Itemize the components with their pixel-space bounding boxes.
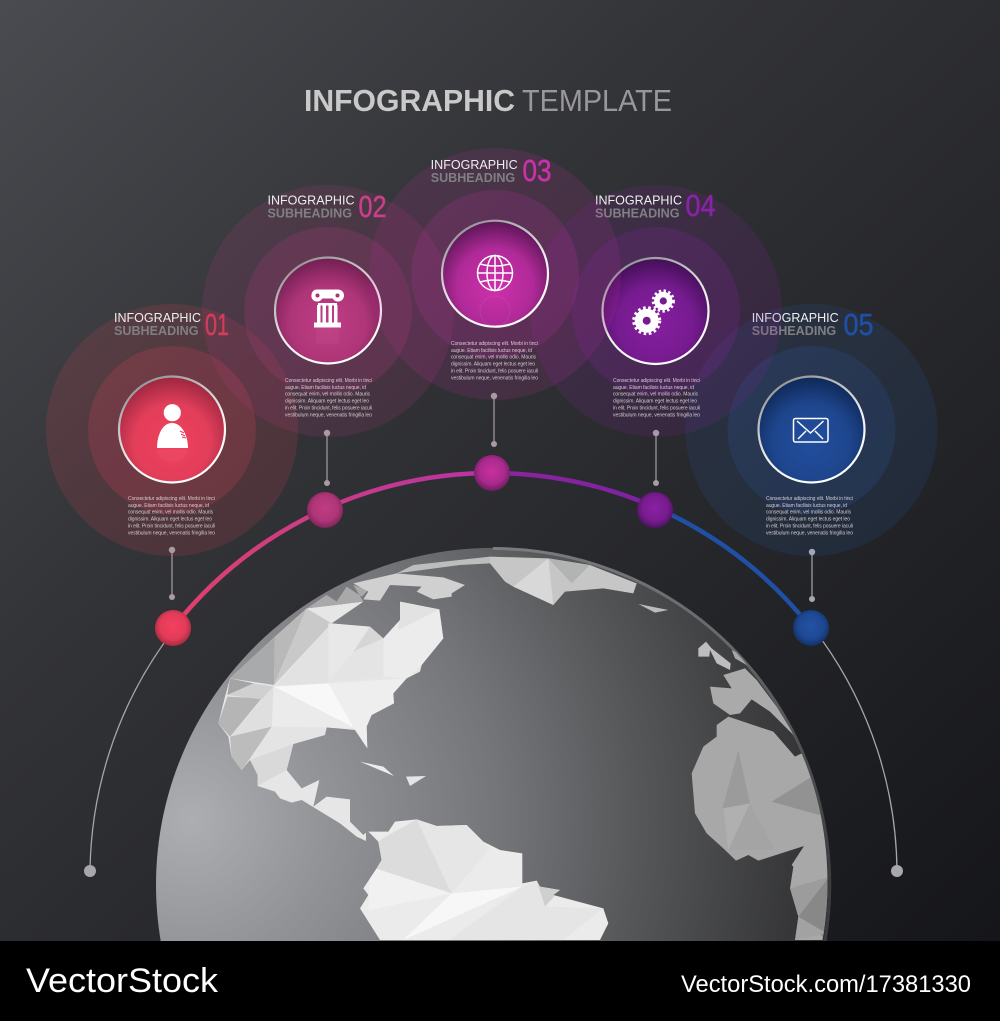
text block 1: consequat enim, vel mollis odio. Mauris xyxy=(128,510,214,516)
heading 4: 04 xyxy=(686,188,716,223)
connector 3 xyxy=(491,393,497,447)
timeline node 2 xyxy=(307,492,343,528)
text block 4: augue. Etiam facilisis luctus neque, id xyxy=(613,385,694,391)
heading 2: 02 xyxy=(358,189,386,224)
icon: column xyxy=(312,290,344,344)
heading 5 xyxy=(752,307,874,342)
text block 5 xyxy=(766,496,853,536)
heading 5: SUBHEADING xyxy=(752,324,836,338)
text block 5: vestibulum neque, venenatis fringilla leo xyxy=(766,530,853,536)
text block 1: dignissim. Aliquam eget lectus eget leo xyxy=(128,517,212,523)
heading 1: INFOGRAPHIC xyxy=(114,311,201,325)
panel 2 xyxy=(202,185,454,437)
heading 1: SUBHEADING xyxy=(114,324,199,338)
Europe and Africa xyxy=(692,642,829,940)
North America xyxy=(218,557,500,841)
title: TEMPLATE xyxy=(522,84,672,118)
heading 5: 05 xyxy=(844,307,874,342)
continents xyxy=(218,557,829,940)
timeline node 3 xyxy=(474,455,510,491)
timeline node 5 xyxy=(793,610,829,646)
panel 3 xyxy=(369,148,621,400)
text block 2: in elit. Proin tincidunt, felis posuere iaculi xyxy=(285,405,372,411)
heading 3: 03 xyxy=(522,153,552,188)
watermark bar: VectorStock xyxy=(26,962,219,1000)
heading 2 xyxy=(268,189,386,224)
text block 2: dignissim. Aliquam eget lectus eget leo xyxy=(285,399,369,405)
icon: person xyxy=(157,404,188,462)
heading 3: INFOGRAPHIC xyxy=(431,158,518,172)
guide end dot left xyxy=(84,865,96,877)
outer guide lines xyxy=(90,640,897,871)
text block 5: consequat enim, vel mollis odio. Mauris xyxy=(766,510,852,516)
halo circles 2 xyxy=(202,185,454,437)
Greenland xyxy=(490,557,668,613)
text block 2: vestibulum neque, venenatis fringilla leo xyxy=(285,412,372,418)
badge 4 xyxy=(602,258,708,364)
heading 5: INFOGRAPHIC xyxy=(752,311,839,325)
heading 1: 01 xyxy=(205,307,229,342)
title: INFOGRAPHIC xyxy=(304,84,515,118)
heading 4: SUBHEADING xyxy=(595,206,680,220)
icon: gears xyxy=(634,291,674,334)
icon: globe xyxy=(478,256,512,326)
connector 1 xyxy=(169,547,175,600)
text block 5: in elit. Proin tincidunt, felis posuere iaculi xyxy=(766,523,853,529)
connector 4 xyxy=(653,430,659,486)
text block 1 xyxy=(128,496,215,536)
heading 1 xyxy=(114,307,229,342)
watermark bar: VectorStock.com/17381330 xyxy=(681,971,971,998)
panel 1 xyxy=(46,304,298,556)
halo circles 5 xyxy=(686,304,938,556)
heading 3 xyxy=(431,153,552,188)
text block 5: augue. Etiam facilisis luctus neque, id xyxy=(766,503,847,509)
timeline arc xyxy=(173,473,811,628)
globe xyxy=(156,548,830,941)
connector 2 xyxy=(324,430,330,486)
panel 4 xyxy=(530,185,782,437)
text block 4: consequat enim, vel mollis odio. Mauris xyxy=(613,392,698,398)
title xyxy=(304,84,672,118)
heading 3: SUBHEADING xyxy=(431,171,515,185)
text block 3: dignissim. Aliquam eget lectus eget leo xyxy=(451,362,535,368)
text block 4: vestibulum neque, venenatis fringilla leo xyxy=(613,412,700,418)
text block 2: consequat enim, vel mollis odio. Mauris xyxy=(285,392,370,398)
text block 3: consequat enim, vel mollis odio. Mauris xyxy=(451,355,536,361)
text block 1: vestibulum neque, venenatis fringilla leo xyxy=(128,530,215,536)
text block 4: in elit. Proin tincidunt, felis posuere iaculi xyxy=(613,405,700,411)
timeline node 4 xyxy=(637,492,673,528)
heading 2: INFOGRAPHIC xyxy=(268,193,354,207)
text block 3: in elit. Proin tincidunt, felis posuere iaculi xyxy=(451,368,538,374)
halo circles 4 xyxy=(530,185,782,437)
heading 2: SUBHEADING xyxy=(268,206,352,220)
heading 4 xyxy=(595,188,716,223)
text block 2 xyxy=(285,378,372,418)
timeline node 1 xyxy=(155,610,191,646)
South America xyxy=(360,819,608,940)
text block 1: in elit. Proin tincidunt, felis posuere iaculi xyxy=(128,523,215,529)
globe rim xyxy=(493,548,830,941)
panel 5 xyxy=(686,304,938,556)
text block 1: augue. Etiam facilisis luctus neque, id xyxy=(128,503,209,509)
badge 1 xyxy=(119,376,225,482)
text block 4: dignissim. Aliquam eget lectus eget leo xyxy=(613,399,697,405)
icon: envelope xyxy=(794,418,828,442)
text block 2: augue. Etiam facilisis luctus neque, id xyxy=(285,385,366,391)
heading 4: INFOGRAPHIC xyxy=(595,193,682,207)
text block 4: Consectetur adipiscing elit. Morbi in tinci xyxy=(613,378,700,384)
badge 3 xyxy=(442,221,548,327)
text block 2: Consectetur adipiscing elit. Morbi in tinci xyxy=(285,378,372,384)
text block 5: dignissim. Aliquam eget lectus eget leo xyxy=(766,517,850,523)
text block 3: Consectetur adipiscing elit. Morbi in tinci xyxy=(451,341,538,347)
text block 4 xyxy=(613,378,700,418)
halo circles 1 xyxy=(46,304,298,556)
connector 5 xyxy=(809,549,815,602)
text block 3: vestibulum neque, venenatis fringilla leo xyxy=(451,375,538,381)
text block 5: Consectetur adipiscing elit. Morbi in tinci xyxy=(766,496,853,502)
halo circles 3 xyxy=(369,148,621,400)
text block 3 xyxy=(451,341,538,381)
text block 3: augue. Etiam facilisis luctus neque, id xyxy=(451,348,532,354)
guide end dot right xyxy=(891,865,903,877)
badge 2 xyxy=(275,258,381,364)
watermark bar xyxy=(0,941,1000,1021)
text block 1: Consectetur adipiscing elit. Morbi in tinci xyxy=(128,496,215,502)
globe sphere xyxy=(156,548,830,941)
badge 5 xyxy=(758,376,864,482)
